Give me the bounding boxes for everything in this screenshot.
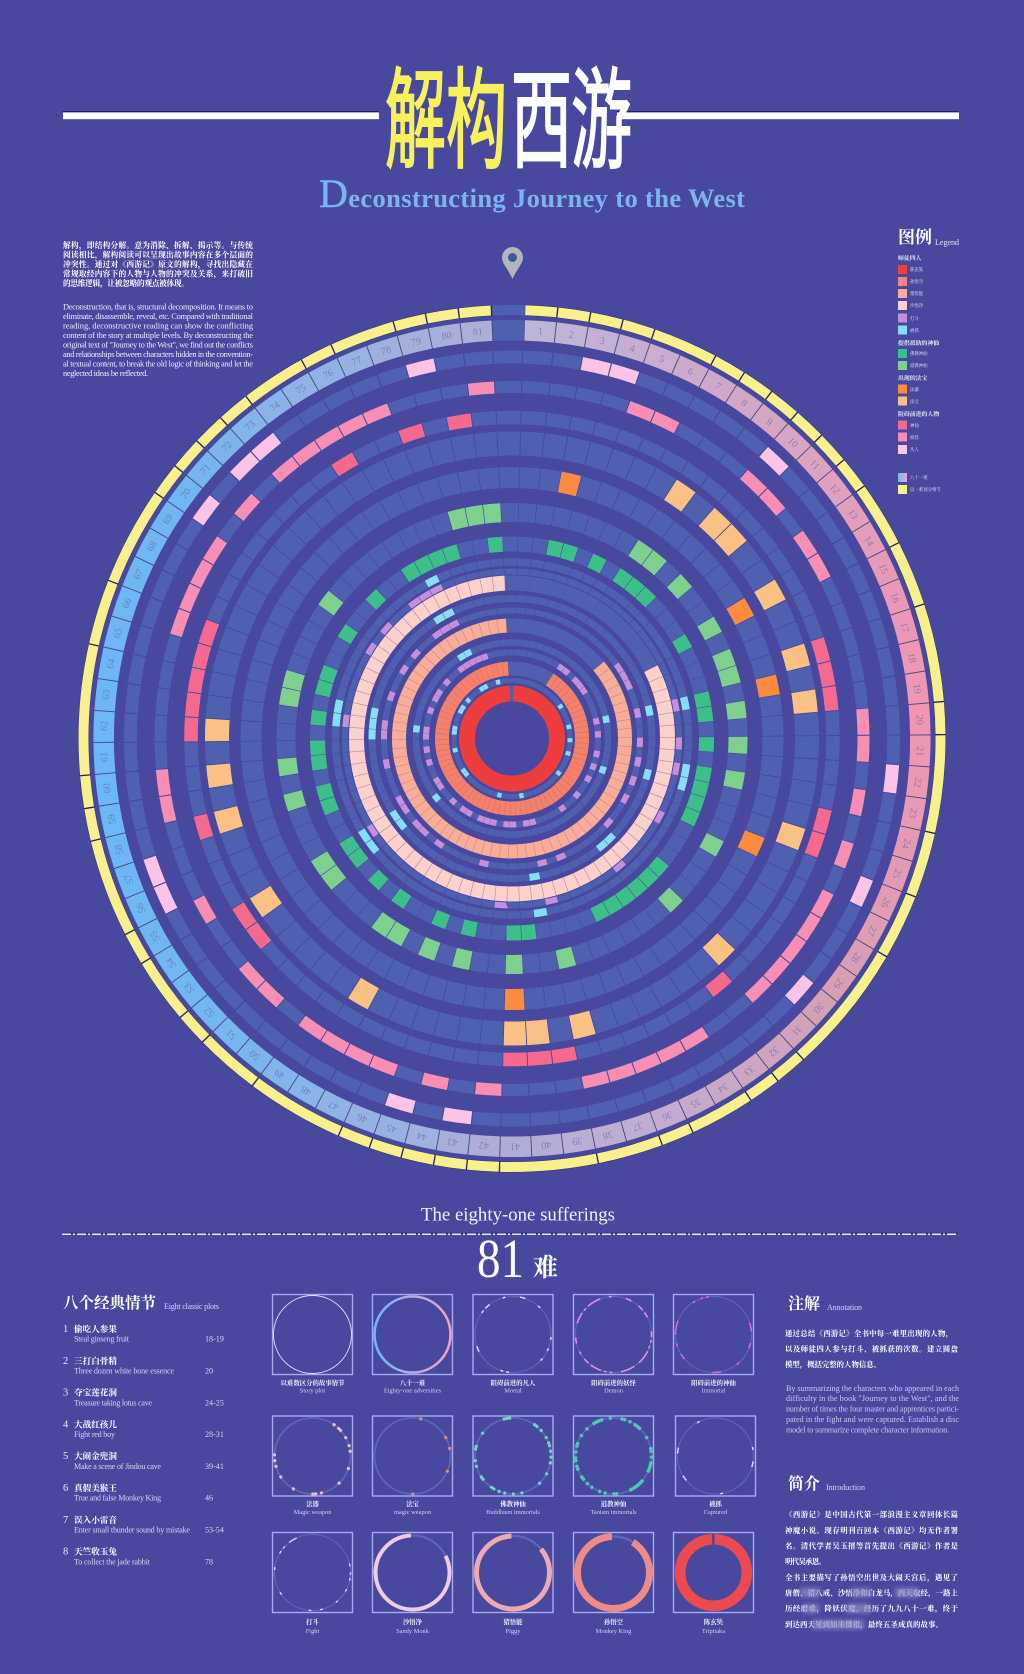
- ring: plot segments: [70, 297, 954, 1180]
- plot 2: Three dozen white bone essence: [74, 1366, 174, 1376]
- suffering numbers: 46: [356, 1111, 369, 1125]
- plot 1: [63, 1323, 224, 1344]
- legend: 法宝: [910, 398, 919, 405]
- plot 3: 3: [63, 1388, 68, 1399]
- suffering numbers: 16: [888, 591, 901, 605]
- plot 5: 大闹金兜洞: [74, 1450, 117, 1461]
- legend: 八十一难: [910, 474, 928, 481]
- plot 8: 78: [205, 1557, 213, 1566]
- legend: 猪悟能: [910, 290, 924, 297]
- plot 7: 误入小雷音: [74, 1514, 117, 1525]
- ring: tripitaka presence: [466, 692, 558, 785]
- small multiple: captured: Captured: [704, 1509, 728, 1516]
- ring: piggy presence: [396, 622, 628, 855]
- suffering numbers: 60: [101, 783, 114, 794]
- plot 3: 夺宝莲花洞: [74, 1387, 117, 1398]
- title: 解构: [385, 32, 507, 191]
- small multiple: taoist immortals: Taoism immortals: [590, 1509, 637, 1516]
- small multiple: fight: Fight: [306, 1628, 319, 1635]
- section heading: The eighty-one sufferings: [421, 1204, 615, 1226]
- suffering numbers: 56: [134, 901, 148, 915]
- plot 6: 6: [63, 1483, 68, 1494]
- plot 1: 偷吃人参果: [74, 1323, 117, 1334]
- suffering numbers: 79: [410, 336, 422, 349]
- suffering numbers: 77: [350, 355, 364, 369]
- suffering numbers: 31: [789, 1023, 804, 1037]
- introduction block: 历经磨难，降妖伏魔，经历了九九八十一难，终于: [785, 1604, 959, 1614]
- small multiple: tripitaka: 陈玄奘: [704, 1617, 724, 1626]
- ring: monkey fights: [423, 650, 601, 827]
- suffering numbers: 50: [248, 1047, 262, 1062]
- suffering numbers: 69: [161, 512, 176, 527]
- annotation block: number of times the four master and apprentices partici-: [786, 1405, 959, 1414]
- suffering numbers: 52: [202, 1004, 217, 1019]
- ring: magic treasures: [208, 434, 816, 1043]
- suffering numbers: 74: [268, 400, 282, 414]
- small multiple: story plot: Story plot: [300, 1388, 325, 1394]
- small multiple: magic weapon: [272, 1416, 352, 1516]
- small multiple: demon: 阻碍前进的妖怪: [591, 1378, 636, 1387]
- plot 8: 天竺收玉兔: [74, 1546, 117, 1557]
- plot 4: 28-31: [205, 1430, 224, 1439]
- small multiple: demon: Demon: [604, 1388, 624, 1394]
- legend: 图例: [898, 228, 932, 247]
- suffering numbers: 10: [785, 435, 800, 450]
- suffering numbers: 68: [145, 539, 160, 554]
- suffering numbers: 43: [447, 1136, 458, 1148]
- suffering numbers: 53: [182, 981, 197, 995]
- ring: taoist immortals: [279, 506, 745, 971]
- ring: monkey captured: [413, 640, 611, 837]
- ring: buddhist immortals: [312, 538, 712, 939]
- small multiple: mortal: [473, 1294, 553, 1394]
- small multiple: piggy: [473, 1532, 553, 1635]
- plot 7: 7: [63, 1515, 68, 1526]
- plot 4: 大战红孩儿: [74, 1418, 117, 1429]
- suffering numbers: 55: [148, 929, 163, 943]
- annotation block: By summarizing the characters who appeared in each: [786, 1384, 959, 1393]
- suffering numbers: 20: [913, 715, 925, 725]
- introduction block: 明代吴承恩。: [785, 1557, 826, 1566]
- introduction block: 《西游记》是中国古代第一部浪漫主义章回体长篇: [785, 1510, 959, 1519]
- chart: eighty-one sufferings radial chart: [70, 297, 954, 1180]
- suffering numbers: 47: [327, 1098, 341, 1112]
- plot 1: 18-19: [205, 1335, 224, 1344]
- plot 6: [63, 1482, 213, 1503]
- suffering numbers: 1: [537, 326, 543, 338]
- legend: 法器: [910, 386, 919, 393]
- suffering numbers: 8: [739, 398, 749, 409]
- suffering numbers: 29: [830, 976, 845, 990]
- suffering numbers: 37: [631, 1119, 644, 1133]
- suffering numbers: 33: [742, 1063, 756, 1077]
- introduction block: 唐僧、猪八戒、沙悟净和白龙马，西天取经，一路上: [785, 1589, 959, 1599]
- intro text: 的思维逻辑，让被忽略的观点被体现。: [63, 278, 189, 289]
- suffering numbers: 12: [827, 482, 842, 496]
- plot 5: 5: [63, 1451, 68, 1462]
- suffering numbers: 4: [628, 343, 636, 355]
- suffering numbers: 67: [132, 568, 146, 581]
- ring: sandy fights: [340, 566, 684, 911]
- small multiple: fight: 打斗: [306, 1617, 319, 1626]
- suffering numbers: 14: [861, 534, 876, 548]
- small multiple: immortal: Immortal: [702, 1388, 726, 1394]
- small multiple: monkey king: [574, 1532, 654, 1635]
- plot 4: Fight red boy: [74, 1430, 116, 1439]
- annotation block: model to summarize complete character information.: [786, 1426, 949, 1435]
- suffering numbers: 48: [299, 1083, 313, 1098]
- suffering numbers: 36: [660, 1108, 674, 1122]
- intro text: 解构，即结构分解。意为消除、拆解、揭示等。与传统: [63, 240, 254, 251]
- small multiple: magic weapon: Magic weapon: [294, 1509, 332, 1516]
- suffering numbers: 71: [198, 462, 213, 477]
- intro text: and relationships between characters hidden in the convention-: [63, 350, 253, 359]
- suffering numbers: 40: [541, 1139, 552, 1150]
- plot 8: To collect the jade rabbit: [74, 1557, 151, 1566]
- small multiple: monkey king: Monkey King: [596, 1628, 632, 1635]
- intro text: reading, deconstructive reading can show the conflicting: [63, 322, 254, 330]
- small multiple: sandy monk: Sandy Monk: [396, 1628, 430, 1635]
- suffering numbers: 25: [890, 867, 903, 880]
- suffering numbers: 45: [386, 1121, 398, 1135]
- plot 8: [63, 1546, 213, 1566]
- small multiple: taoist immortals: 道教神仙: [601, 1499, 627, 1508]
- intro text: eliminate, disassemble, reveal, etc. Compared with traditional: [63, 312, 254, 321]
- title rule right: [617, 111, 959, 119]
- legend: [898, 228, 959, 494]
- intro text: 常规取经内容下的人物与人物的冲突及关系，来打破旧: [63, 268, 253, 280]
- plot 3: 24-25: [205, 1398, 224, 1407]
- small multiple: captured: [676, 1416, 756, 1516]
- intro text: al textual content, to break the old logic of thinking and let the: [63, 360, 253, 368]
- suffering numbers: 63: [101, 689, 113, 700]
- suffering numbers: 24: [899, 837, 912, 850]
- suffering numbers: [99, 326, 925, 1152]
- legend: 陈玄奘: [910, 266, 924, 273]
- suffering numbers: 5: [657, 353, 666, 365]
- small multiple: buddhist immortals: Buddhism immortals: [486, 1509, 540, 1516]
- plot 1: Steal ginseng fruit: [74, 1335, 130, 1344]
- plot 5: Make a scene of Jindou cave: [74, 1462, 161, 1471]
- suffering numbers: 11: [807, 458, 822, 472]
- annotation block: 注解: [788, 1294, 820, 1313]
- legend: 被抓: [910, 327, 919, 334]
- small multiple: magic weapon: 法器: [306, 1499, 319, 1508]
- ring: immortals: [181, 408, 843, 1069]
- plot 6: 46: [205, 1494, 213, 1503]
- small multiple: sandy monk: 沙悟净: [403, 1617, 423, 1626]
- plot 6: 真假美猴王: [74, 1482, 117, 1493]
- suffering numbers: 61: [99, 752, 111, 762]
- suffering numbers: 2: [568, 330, 575, 341]
- ring: sandy monk presence: [352, 578, 672, 899]
- suffering numbers: 75: [294, 382, 308, 397]
- suffering numbers: 6: [686, 366, 695, 378]
- small multiple: eighty-one adversities: 八十一难: [400, 1378, 426, 1387]
- introduction block: [785, 1474, 959, 1630]
- legend: 神仙: [910, 422, 919, 429]
- suffering numbers: 3: [598, 335, 606, 347]
- legend: 妖怪: [910, 434, 919, 441]
- big number: 81: [477, 1228, 524, 1289]
- plot 5: 39-41: [205, 1462, 224, 1471]
- suffering numbers: 65: [112, 627, 125, 640]
- legend: 出现的法宝: [898, 374, 928, 382]
- suffering numbers: 78: [380, 344, 393, 358]
- small multiple: immortal: 阻碍前进的神仙: [691, 1378, 736, 1387]
- title: 西游: [511, 32, 632, 191]
- intro text: Deconstruction, that is, structural decomposition. It means to: [63, 302, 253, 312]
- suffering numbers: 30: [811, 1000, 826, 1015]
- introduction block: 神魔小说。现存明刊百回本《西游记》均无作者署: [785, 1526, 959, 1535]
- suffering numbers: 21: [914, 746, 925, 756]
- icon: start pin: [502, 247, 523, 279]
- intro text: original text of "Journey to the West", we find out the conflicts: [63, 340, 253, 350]
- ring: sandy captured: [330, 557, 694, 920]
- plot 7: 53-54: [205, 1526, 224, 1534]
- suffering numbers: 17: [897, 621, 911, 634]
- big number: [477, 1228, 558, 1289]
- small multiple: tripitaka: Tripitaka: [702, 1628, 725, 1635]
- plot 7: [63, 1514, 224, 1534]
- suffering numbers: 42: [478, 1139, 489, 1151]
- legend: 以一难划分情节: [910, 486, 941, 493]
- small multiple: story plot: 以难数区分的故事情节: [281, 1378, 345, 1387]
- legend: 凡人: [910, 446, 919, 453]
- suffering numbers: 23: [906, 807, 919, 819]
- small multiple: eighty-one adversities: [372, 1294, 452, 1394]
- legend: 打斗: [910, 315, 919, 322]
- suffering numbers: 18: [905, 652, 918, 664]
- suffering numbers: 73: [243, 419, 258, 433]
- suffering numbers: 26: [878, 896, 892, 909]
- suffering numbers: 76: [322, 368, 335, 382]
- suffering numbers: 41: [510, 1140, 520, 1152]
- suffering numbers: 57: [123, 872, 136, 886]
- plot 8: 8: [63, 1547, 68, 1558]
- title rule left: [63, 111, 379, 119]
- small multiple: taoist immortals: [574, 1416, 654, 1516]
- small multiple: demon: [574, 1294, 654, 1394]
- plot 2: [63, 1355, 213, 1376]
- plot 3: Treasure taking lotus cave: [74, 1398, 152, 1407]
- suffering numbers: 38: [602, 1128, 614, 1141]
- annotation block: 以及师徒四人参与打斗、被抓获的次数。建立圆盘: [785, 1345, 959, 1354]
- plot 2: 2: [63, 1356, 68, 1367]
- small multiple: magic treasure: 法宝: [406, 1499, 419, 1508]
- suffering numbers: 59: [106, 813, 119, 825]
- suffering numbers: 32: [766, 1044, 781, 1058]
- subtitle: Deconstructing Journey to the West: [319, 171, 745, 216]
- plot 1: 1: [63, 1324, 68, 1335]
- suffering numbers: 15: [876, 562, 890, 576]
- suffering numbers: 34: [716, 1080, 730, 1095]
- plot 6: True and false Monkey King: [74, 1494, 161, 1503]
- small multiple: captured: 被抓: [709, 1499, 722, 1508]
- suffering numbers: 19: [910, 683, 923, 694]
- small multiple: sandy monk: [372, 1532, 452, 1635]
- legend: 提供援助的神仙: [898, 339, 939, 347]
- small multiple: immortal: [674, 1294, 754, 1394]
- introduction block: 到达西天见到如来佛祖，最终五圣成真的故事。: [785, 1620, 943, 1630]
- title: [385, 32, 632, 191]
- plots list: Eight classic plots: [164, 1302, 219, 1311]
- small multiple: tripitaka: [674, 1532, 754, 1635]
- suffering numbers: 70: [179, 487, 193, 501]
- ring: mortals: [119, 345, 905, 1132]
- legend: 师徒四人: [898, 254, 922, 262]
- suffering numbers: 51: [224, 1027, 239, 1042]
- small multiple: piggy: 猪悟能: [503, 1617, 523, 1626]
- plots list: [63, 1293, 224, 1566]
- suffering numbers: 35: [689, 1095, 702, 1110]
- small multiple: mortal: Mortal: [504, 1388, 522, 1394]
- small multiple: piggy: Piggy: [506, 1628, 521, 1635]
- suffering numbers: 27: [864, 924, 879, 938]
- suffering numbers: 28: [848, 950, 863, 965]
- intro text: 冲突性。通过对《西游记》原文的解构，寻找出隐藏在: [63, 259, 253, 270]
- annotation block: pated in the fight and were captured. Establish a disc: [786, 1415, 959, 1424]
- plots list: 八个经典情节: [63, 1293, 157, 1312]
- suffering numbers: 64: [105, 658, 118, 670]
- small multiple: magic treasure: [372, 1416, 452, 1516]
- plot 7: Enter small thunder sound by mistake: [74, 1526, 190, 1534]
- plot 4: [63, 1418, 224, 1439]
- small multiple: mortal: 阻碍前进的凡人: [491, 1378, 536, 1387]
- suffering numbers: 81: [472, 327, 483, 338]
- legend: Legend: [935, 238, 959, 247]
- small multiple: monkey king: 孙悟空: [604, 1617, 624, 1626]
- introduction block: 简介: [788, 1474, 820, 1493]
- intro text: 阅读相比，解构阅读可以呈现出故事内容在多个层面的: [63, 250, 253, 260]
- small multiple: fight: [272, 1532, 352, 1635]
- legend: 佛教神仙: [910, 350, 928, 357]
- ring: monkey presence: [440, 666, 584, 811]
- plot 2: 20: [205, 1366, 213, 1376]
- introduction block: 名。清代学者吴玉搢等首先提出《西游记》作者是: [785, 1542, 959, 1551]
- annotation block: Annotation: [827, 1303, 862, 1312]
- ring: demons: [150, 376, 874, 1101]
- suffering numbers: 13: [845, 507, 860, 522]
- suffering numbers: 22: [911, 777, 923, 788]
- big number: 难: [533, 1254, 558, 1282]
- suffering numbers: 58: [113, 843, 127, 856]
- suffering numbers: 44: [416, 1129, 428, 1142]
- plot 3: [63, 1387, 224, 1407]
- introduction block: Introduction: [826, 1483, 865, 1492]
- suffering numbers: 54: [164, 955, 179, 970]
- suffering numbers: 39: [571, 1135, 583, 1147]
- suffering numbers: 80: [441, 330, 453, 342]
- annotation block: 模型，概括完整的人物信息。: [785, 1360, 881, 1370]
- small multiple: magic treasure: magic weapon: [394, 1509, 432, 1516]
- small multiple: buddhist immortals: [473, 1416, 553, 1516]
- plot 2: 三打白骨精: [74, 1355, 117, 1366]
- intro text: content of the story at multiple levels. By deconstructing the: [63, 331, 253, 340]
- ring: piggy captured: [368, 594, 656, 883]
- legend: 沙悟净: [910, 302, 924, 309]
- suffering numbers: 7: [713, 381, 723, 393]
- annotation block: [785, 1294, 959, 1435]
- suffering numbers: 66: [121, 597, 134, 610]
- intro text: neglected ideas be reflected.: [63, 369, 148, 378]
- suffering numbers: 49: [273, 1066, 287, 1081]
- legend: 阻碍前进的人物: [898, 410, 939, 418]
- introduction block: 全书主要描写了孙悟空出世及大闹天宫后，遇见了: [785, 1573, 958, 1583]
- ring: piggy fights: [380, 607, 644, 870]
- legend: 道教神仙: [910, 362, 928, 369]
- annotation block: difficulty in the book "Journey to the West", and the: [786, 1394, 959, 1403]
- annotation block: 通过总结《西游记》全书中每一难里出现的人物，: [785, 1329, 953, 1339]
- small multiple: story plot: [272, 1294, 352, 1394]
- suffering numbers: 72: [220, 440, 235, 454]
- intro text: [63, 240, 254, 378]
- suffering numbers: 9: [764, 416, 774, 428]
- plot 4: 4: [63, 1419, 69, 1430]
- small multiple: buddhist immortals: 佛教神仙: [500, 1499, 526, 1508]
- small multiple: eighty-one adversities: Eighty-one adversities: [384, 1388, 442, 1394]
- legend: 孙悟空: [910, 278, 924, 285]
- suffering numbers: 62: [99, 721, 110, 731]
- ring: magic weapons: [243, 470, 781, 1007]
- ring: tripitaka captured: [452, 679, 572, 798]
- ring: 81 sufferings cells: [91, 318, 933, 1159]
- plot 5: [63, 1450, 224, 1471]
- section divider: [62, 1232, 958, 1235]
